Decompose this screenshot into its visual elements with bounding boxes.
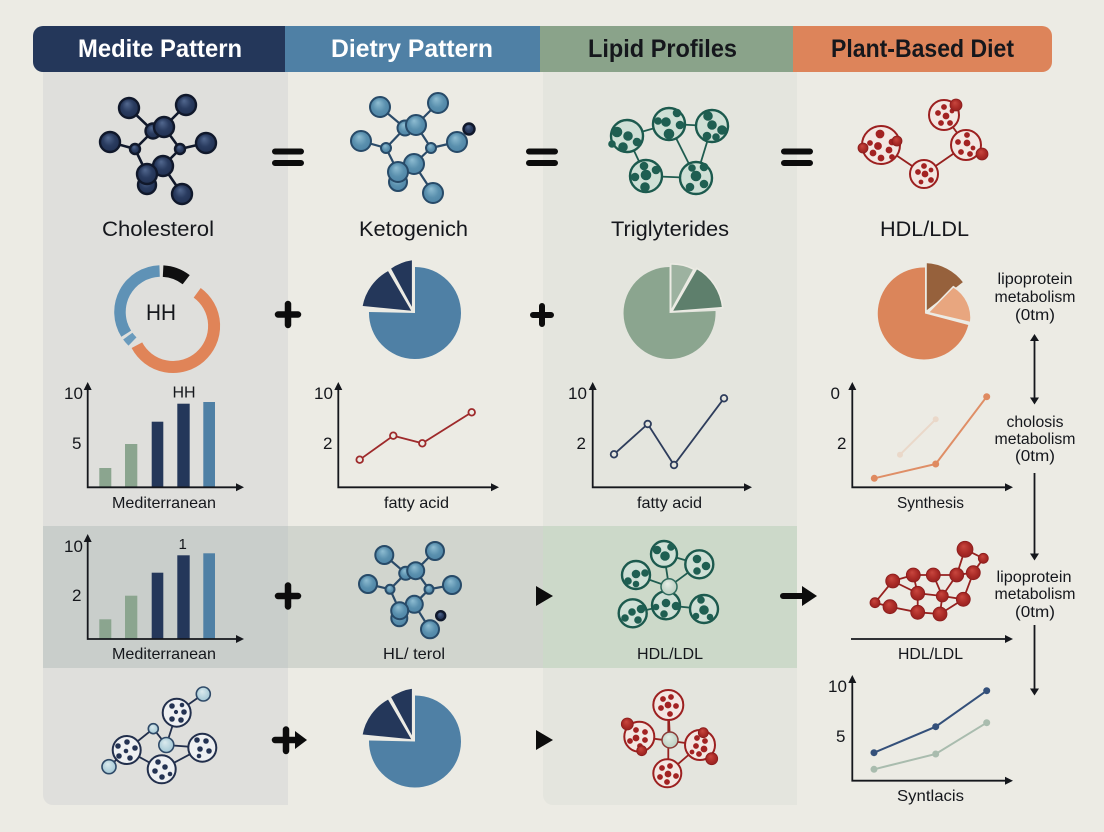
header: Lipid Profiles: Lipid Profiles [588, 35, 737, 63]
symbol: plus 3 [278, 586, 298, 606]
icon: green cluster lower [619, 541, 718, 627]
label: Cholesterol: Cholesterol [102, 218, 214, 241]
icon: red particle cross [621, 690, 718, 787]
arrow: down to lipoprotein [1030, 473, 1039, 560]
pie chart: orange [878, 262, 971, 359]
side note: cholosis metabolism: (0tm) [1015, 448, 1055, 465]
pie chart: green [624, 264, 723, 359]
bar chart: Mediterranean top: 10 [64, 384, 83, 403]
arrow: horizontal under red molecule [851, 635, 1013, 643]
icon: blue molecule lower [359, 542, 461, 638]
bar chart: Mediterranean lower: 2 [72, 586, 81, 605]
header bar [33, 26, 1052, 72]
icon: green triglyceride cluster [609, 108, 728, 194]
side note: lipoprotein metabolism: lipoprotein [998, 271, 1072, 288]
symbol: equals 1 [272, 148, 304, 166]
label: Ketogenich: Ketogenich [359, 218, 468, 241]
symbol: equals 2 [526, 148, 558, 166]
line chart: synthesis orange: Synthesis [897, 495, 964, 512]
side note: cholosis metabolism [994, 414, 1076, 465]
bar chart: Mediterranean top: HH [172, 384, 196, 402]
side note: lipoprotein metabolism lower: (0tm) [1015, 604, 1055, 621]
pie chart: blue lower [362, 688, 461, 788]
line chart: fatty acid navy: 10 [568, 384, 587, 403]
donut centre label: HH [146, 300, 176, 325]
label: HL/ terol: HL/ terol [383, 646, 445, 663]
header: Medite Pattern: Medite Pattern [78, 35, 242, 63]
arrow: row four to red molecule [780, 586, 817, 606]
label: Triglyterides: Triglyterides [611, 218, 729, 241]
side note: lipoprotein metabolism lower [994, 569, 1076, 621]
line chart: fatty acid navy: 2 [576, 434, 586, 453]
side note: lipoprotein metabolism lower: lipoprotein [996, 569, 1072, 586]
side note: cholosis metabolism: metabolism [994, 431, 1076, 448]
header: Dietry Pattern: Dietry Pattern [331, 35, 493, 63]
line chart: synthesis orange [830, 382, 1013, 512]
icon: red HDL/LDL cluster [858, 99, 988, 188]
line chart: synthesis orange: 0 [830, 384, 840, 403]
symbol: triangle 1 [536, 586, 553, 606]
line chart: synthacis two series: 10 [828, 677, 847, 696]
side note: lipoprotein metabolism [994, 271, 1076, 324]
symbol: plus 1 [278, 304, 298, 325]
line chart: fatty acid red: 2 [323, 434, 332, 453]
line chart: fatty acid navy [568, 382, 752, 512]
line chart: fatty acid navy: fatty acid [637, 495, 702, 512]
line chart: synthacis two series: 5 [836, 727, 845, 746]
bar chart: Mediterranean lower [64, 534, 244, 663]
arrow: double headed [1030, 334, 1039, 404]
symbol: plus with arrow [275, 730, 307, 751]
donut chart with HH [120, 271, 214, 367]
bar chart: Mediterranean lower: 10 [64, 537, 83, 556]
line chart: synthacis two series: Syntlacis [897, 788, 964, 805]
icon: dark cholesterol molecule [100, 95, 216, 204]
line chart: fatty acid red: 10 [314, 384, 333, 403]
label: HDL/LDL green: HDL/LDL [637, 646, 703, 663]
bar chart: Mediterranean top: 5 [72, 434, 81, 453]
symbol: equals 3 [781, 148, 813, 166]
label: HDL/LDL red: HDL/LDL [898, 646, 963, 663]
line chart: fatty acid red [314, 382, 499, 512]
column band: third column [543, 72, 797, 805]
line chart: synthesis orange: 2 [837, 434, 846, 453]
bar chart: Mediterranean lower: Mediterranean [112, 646, 216, 663]
line chart: fatty acid red: fatty acid [384, 495, 449, 512]
pie chart: blue [362, 259, 461, 359]
icon: navy particle network [102, 687, 216, 783]
symbol: triangle 2 [536, 730, 553, 750]
icon: blue ketogenic molecule [351, 93, 474, 203]
header: Plant-Based Diet: Plant-Based Diet [831, 35, 1015, 63]
column band: first column [43, 72, 288, 805]
bar chart: Mediterranean top [64, 382, 244, 512]
symbol: plus 2 [533, 306, 551, 324]
side note: lipoprotein metabolism lower: metabolism [994, 586, 1076, 603]
bar chart: Mediterranean top: Mediterranean [112, 495, 216, 512]
line chart: synthacis two series [828, 675, 1013, 805]
highlighted row band [43, 526, 797, 668]
icon: solid red molecule [870, 541, 988, 621]
side note: lipoprotein metabolism: metabolism [994, 289, 1076, 306]
side note: lipoprotein metabolism: (0tm) [1015, 307, 1055, 324]
side note: cholosis metabolism: cholosis [1006, 414, 1064, 431]
label: HDL/LDL: HDL/LDL [880, 218, 969, 241]
arrow: down from lipoprotein [1030, 625, 1039, 696]
bar chart: Mediterranean lower: 1 [178, 536, 187, 553]
